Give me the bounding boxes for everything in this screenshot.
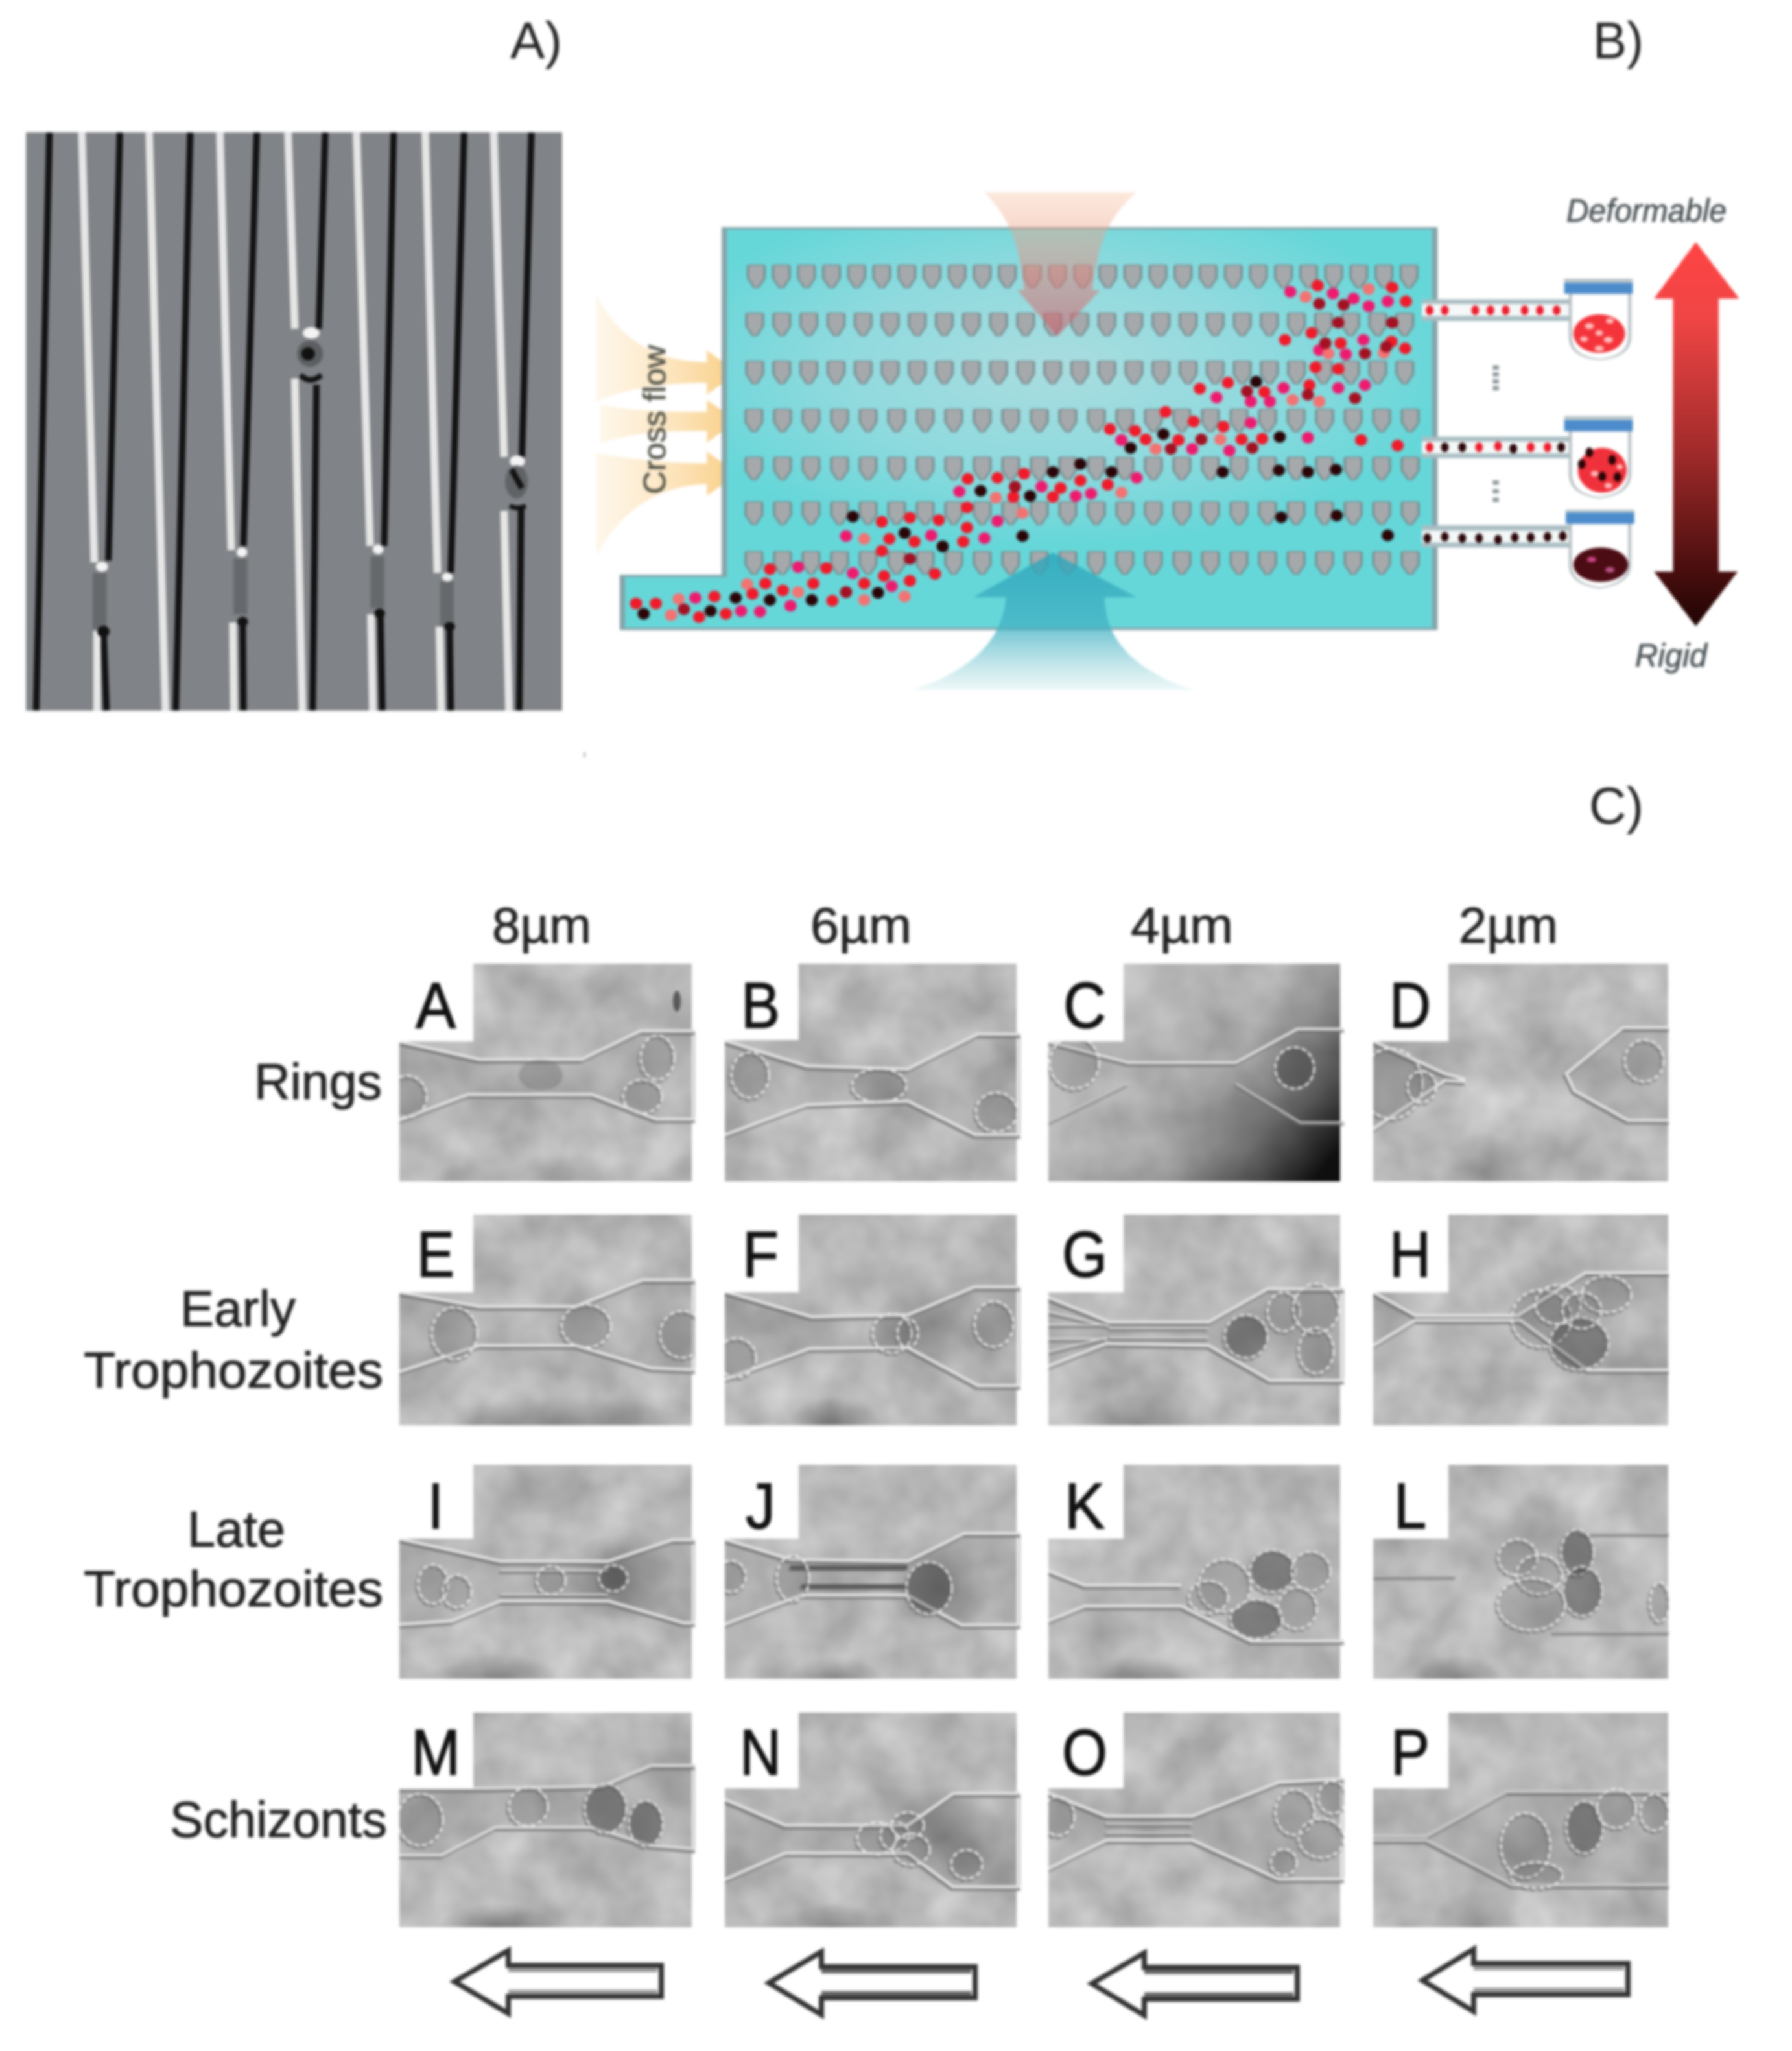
panel C: rings 4um [1042, 964, 1347, 1181]
row label: Rings: Rings [254, 1053, 382, 1110]
letter F: F [742, 1218, 779, 1291]
panel J: late trophozoites 6um [717, 1465, 1023, 1702]
flow arrow: 6um column [769, 1952, 975, 2015]
collection tube: intermediate [1564, 416, 1633, 498]
continuation dots [1492, 366, 1499, 502]
row label: Early Trophozoites: Early [180, 1280, 296, 1337]
collection tube: deformable [1564, 279, 1633, 359]
letter M: M [411, 1716, 460, 1789]
chip body [622, 228, 1435, 629]
top flow arrow [984, 192, 1137, 337]
label: rigid: Rigid [1635, 637, 1708, 674]
column heading: 4 micrometres: 4µm [1131, 897, 1233, 954]
panel A: micrograph of tapered channels with trapped cells [26, 132, 562, 711]
letter L: L [1394, 1470, 1426, 1543]
row label: Late Trophozoites: Late [187, 1500, 285, 1558]
panel N: schizonts 6um [718, 1713, 1023, 1950]
peg rows [740, 263, 1424, 576]
flow arrow: 8um column [454, 1950, 661, 2013]
row label: Schizonts: Schizonts [170, 1791, 387, 1848]
label: C): C) [1589, 777, 1644, 835]
column heading: 6 micrometres: 6µm [810, 897, 912, 954]
letter C: C [1063, 969, 1106, 1042]
letter K: K [1065, 1470, 1105, 1543]
panel B: deterministic-lateral-displacement chip schematic [596, 192, 1739, 690]
letter G: G [1062, 1218, 1107, 1291]
letter E: E [417, 1218, 454, 1291]
cells: black [637, 376, 1394, 619]
letter H: H [1389, 1218, 1431, 1291]
deformability gradient arrow [1654, 242, 1739, 626]
panel A: rings 8um [397, 962, 697, 1183]
letter D: D [1389, 969, 1431, 1042]
label: A): A) [510, 12, 562, 69]
outlet channels [1422, 300, 1570, 547]
cells: bright red [630, 279, 1412, 623]
letter J: J [746, 1470, 775, 1543]
trapped cells [96, 327, 528, 637]
letter O: O [1062, 1716, 1107, 1789]
cells: dark red [678, 298, 1398, 615]
panel K: late trophozoites 4um [1042, 1465, 1347, 1702]
collection tube: rigid [1566, 510, 1634, 588]
label: B): B) [1593, 12, 1644, 69]
panel M: schizonts 8um [393, 1713, 698, 1950]
panel F: early trophozoites 6um [723, 1213, 1022, 1427]
row label: Early Trophozoites: Trophozoites [84, 1342, 383, 1399]
panel D: rings 2um [1371, 962, 1671, 1183]
bottom flow arrow [912, 552, 1194, 690]
panel O: schizonts 4um [1042, 1713, 1347, 1927]
panel E: early trophozoites 8um [397, 1213, 697, 1427]
cells: pink [689, 286, 1394, 617]
column heading: 8 micrometres: 8µm [492, 897, 591, 954]
row label: Late Trophozoites [84, 1500, 383, 1617]
panel H: early trophozoites 2um [1367, 1215, 1675, 1425]
row label: Late Trophozoites: Trophozoites [84, 1560, 383, 1617]
cross flow arrows [596, 295, 737, 556]
letter B: B [741, 969, 780, 1042]
panel B: rings 6um [718, 964, 1023, 1181]
panel P: schizonts 2um [1367, 1713, 1675, 1965]
panel I: late trophozoites 8um [393, 1465, 698, 1705]
panel G: early trophozoites 4um [1046, 1213, 1346, 1427]
letter N: N [740, 1716, 781, 1789]
letter P: P [1391, 1716, 1430, 1789]
row label: Early Trophozoites [84, 1280, 383, 1399]
label: deformable: Deformable [1566, 193, 1727, 229]
cells: salmon [665, 283, 1390, 621]
flow arrow: 4um column [1092, 1953, 1297, 2015]
letter A: A [416, 969, 456, 1042]
column heading: 2 micrometres: 2µm [1459, 897, 1558, 954]
letter I: I [428, 1470, 443, 1543]
panel L: late trophozoites 2um [1373, 1465, 1675, 1702]
flow arrow: 2um column [1422, 1949, 1628, 2011]
label: cross flow: Cross flow [638, 345, 672, 494]
small speck [584, 752, 585, 757]
